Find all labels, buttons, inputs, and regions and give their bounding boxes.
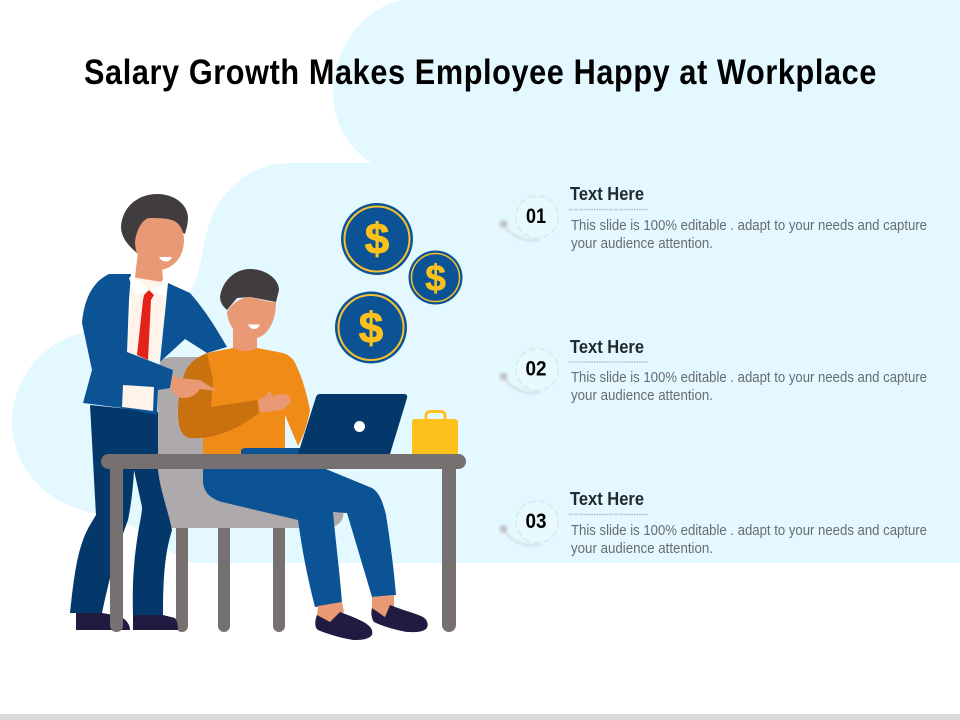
- number badge 02: [500, 348, 558, 393]
- standing man: pointing hand: [170, 375, 217, 398]
- item 02: [500, 337, 927, 404]
- description 02: This slide is 100% editable . adapt to your needs and capture: [571, 370, 927, 386]
- seated man: face: [227, 297, 276, 339]
- table legs: [110, 460, 456, 632]
- number badge 03: [500, 501, 558, 545]
- coin 2: [408, 250, 462, 304]
- number badge 01: 01: [526, 205, 546, 228]
- heading 01: Text Here: [570, 184, 644, 204]
- item 01: [500, 184, 927, 252]
- laptop base: [241, 448, 305, 454]
- heading 02: Text Here: [570, 337, 644, 357]
- bottom strip: [0, 714, 960, 720]
- seated man: sweater: [203, 348, 310, 454]
- standing man: neck: [135, 252, 163, 292]
- seated man: pants: [203, 465, 396, 607]
- table top: [101, 454, 466, 469]
- heading 03: Text Here: [570, 489, 644, 509]
- chair legs: [176, 520, 285, 632]
- number badge 01: [500, 196, 558, 240]
- chair: [158, 357, 343, 528]
- number badge 02: 02: [526, 358, 546, 380]
- seated man: sleeve: [178, 353, 259, 438]
- background blob: [12, 0, 960, 563]
- seated man: smile: [248, 324, 260, 329]
- standing man: legs: [70, 405, 172, 615]
- standing man: jacket right panel: [160, 283, 227, 362]
- standing man: shoes: [76, 613, 178, 630]
- illustration: two employees at desk: [70, 194, 466, 640]
- description 01: your audience attention.: [571, 236, 713, 252]
- description 03: your audience attention.: [571, 541, 713, 557]
- number badge 03: 03: [526, 510, 546, 533]
- standing man: collar: [129, 275, 168, 297]
- standing man: hair: [121, 194, 188, 253]
- standing man: smile: [159, 257, 172, 262]
- seated man: hand: [258, 390, 291, 412]
- seated man: hair: [220, 269, 279, 310]
- laptop logo: [354, 421, 365, 432]
- standing man: face: [135, 218, 184, 270]
- standing man: shirt: [127, 277, 168, 362]
- description 01: This slide is 100% editable . adapt to your needs and capture: [571, 218, 927, 234]
- seated man: ankles: [317, 595, 394, 623]
- seated man: shoes: [315, 605, 428, 640]
- seated man: neck: [233, 325, 257, 352]
- description 02: your audience attention.: [571, 388, 713, 404]
- laptop: [298, 394, 407, 454]
- description 03: This slide is 100% editable . adapt to your needs and capture: [571, 523, 927, 539]
- coin 1: [341, 203, 413, 275]
- coin 2: $: [425, 258, 446, 298]
- coin 3: $: [359, 304, 383, 353]
- item 03: [500, 489, 927, 557]
- standing man: tie: [137, 290, 154, 360]
- standing man: shirt lower patch: [122, 385, 154, 411]
- briefcase: [412, 412, 458, 454]
- standing man: jacket: [82, 274, 173, 415]
- coin 3: [335, 292, 407, 364]
- coin 1: $: [365, 215, 389, 264]
